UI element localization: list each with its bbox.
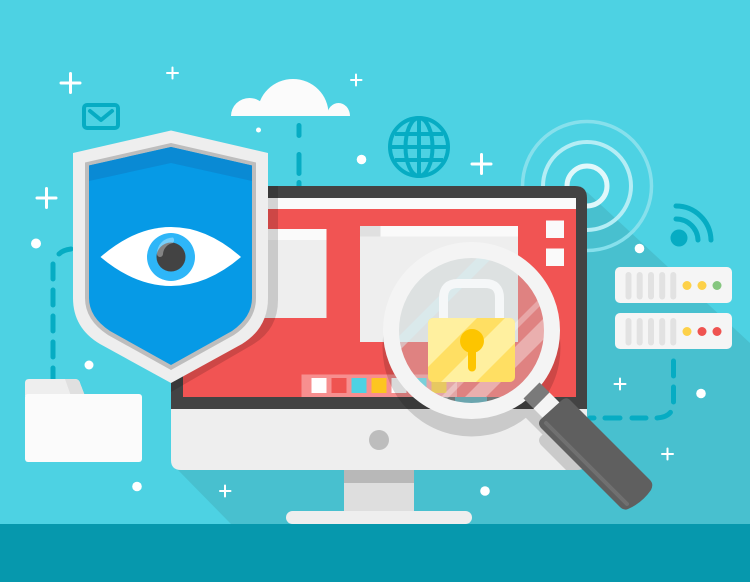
folder connector — [53, 249, 71, 379]
server rack bottom — [615, 313, 732, 349]
right window — [360, 226, 518, 342]
left window — [240, 229, 326, 318]
floor band — [0, 524, 750, 582]
shield rim — [73, 130, 268, 383]
screen title bar — [183, 198, 576, 209]
magnifier — [383, 255, 652, 510]
magnifier lens — [399, 258, 544, 403]
sparkles — [37, 68, 673, 496]
magnifier handle — [539, 398, 652, 510]
monitor frame — [171, 186, 587, 420]
magnifier neck — [524, 382, 562, 420]
icon: cloud — [231, 79, 350, 116]
icon: globe — [390, 118, 448, 176]
target rings — [522, 122, 652, 250]
magnifier ring — [391, 250, 552, 411]
shield — [73, 130, 268, 383]
shield shadow — [171, 186, 278, 392]
monitor chin — [171, 409, 587, 470]
power button — [369, 430, 389, 450]
icon: eye — [100, 227, 241, 286]
magnifier shadow — [382, 336, 582, 470]
shadows on monitor — [171, 131, 652, 527]
server connector — [590, 361, 674, 418]
shield inner edge — [85, 143, 256, 370]
padlock shackle — [444, 284, 500, 325]
shield top band — [89, 147, 252, 181]
icon: wifi — [670, 206, 711, 246]
padlock keyhole — [460, 329, 484, 372]
screen — [183, 209, 576, 397]
padlock body — [428, 318, 515, 382]
icon: padlock — [428, 279, 515, 382]
long shadow — [176, 192, 750, 524]
dots — [31, 128, 706, 496]
monitor stand — [286, 470, 472, 524]
cloud connector — [296, 126, 302, 186]
window buttons — [546, 220, 564, 266]
dock — [302, 374, 457, 397]
monitor — [171, 186, 587, 470]
folder — [25, 379, 142, 462]
shield face — [89, 147, 252, 365]
server rack top — [615, 267, 732, 303]
icon: mail — [84, 105, 118, 128]
